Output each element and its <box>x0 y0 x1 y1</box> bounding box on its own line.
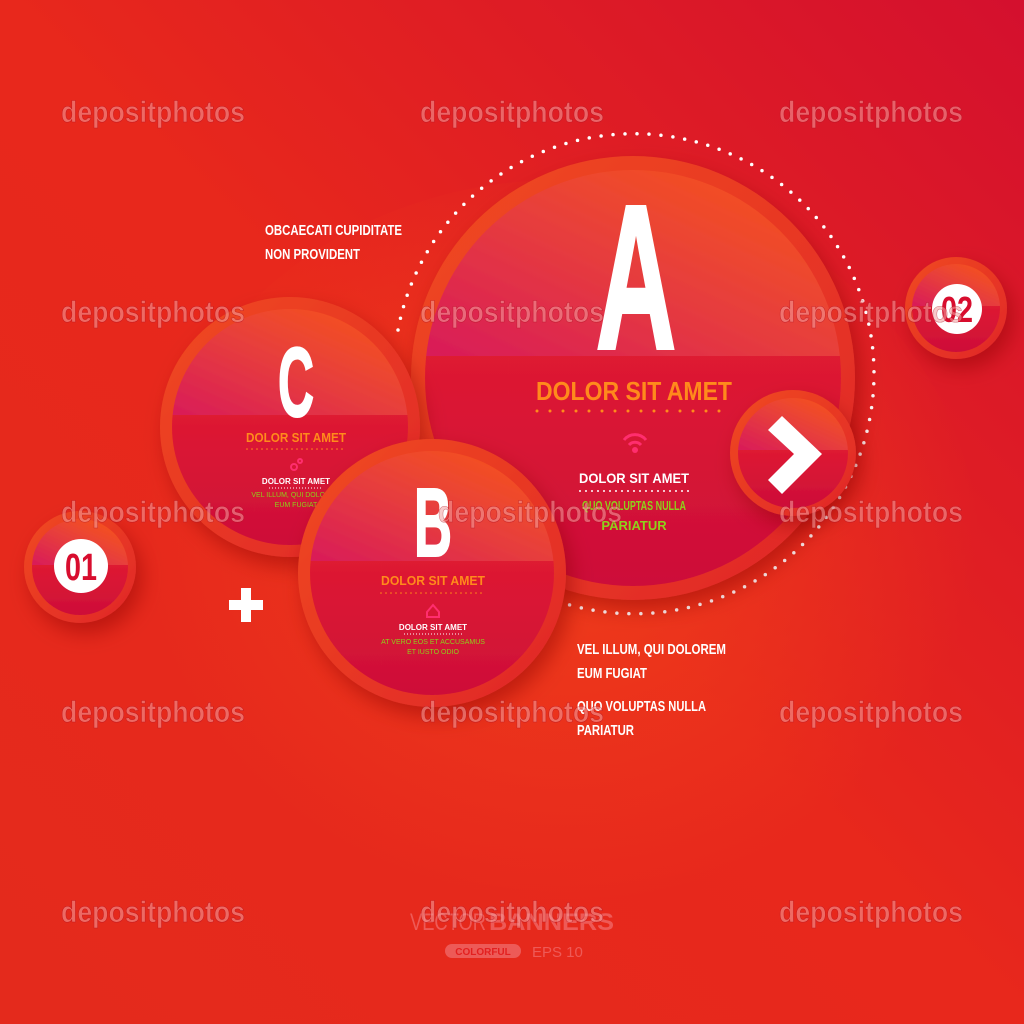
text: obcaecati: NON PROVIDENT <box>265 246 360 263</box>
watermarks: depositphotos <box>779 96 963 129</box>
watermarks <box>61 96 963 929</box>
icon: house <box>427 605 439 617</box>
badge 01 <box>24 511 136 623</box>
circle C: DOLOR SIT AMET <box>262 477 330 486</box>
footer: vector banners: VECTOR <box>410 909 486 936</box>
watermarks: depositphotos <box>779 496 963 529</box>
footer: vector banners: COLORFUL <box>455 947 511 958</box>
circle C: DOLOR SIT AMET <box>246 430 346 445</box>
circle B: DOLOR SIT AMET <box>381 573 485 588</box>
watermarks: depositphotos <box>61 496 245 529</box>
dotted ring around A <box>398 134 874 614</box>
circle B: AT VERO EOS ET ACCUSAMUS <box>381 639 485 646</box>
circle A: PARIATUR <box>601 518 667 533</box>
text: obcaecati: OBCAECATI CUPIDITATE <box>265 222 402 239</box>
watermarks: depositphotos <box>420 696 604 729</box>
letter A: A <box>596 163 676 392</box>
watermarks: depositphotos <box>61 896 245 929</box>
circle A: QUO VOLUPTAS NULLA <box>582 498 686 513</box>
text: vel illum: EUM FUGIAT <box>577 665 647 682</box>
circle A <box>410 150 860 600</box>
circle B <box>298 439 570 711</box>
watermarks: depositphotos <box>438 496 622 529</box>
A subheading: DOLOR SIT AMET <box>579 470 689 486</box>
text: vel illum <box>577 641 726 739</box>
icon: wifi <box>624 435 646 445</box>
watermarks: depositphotos <box>420 296 604 329</box>
circle C: C <box>278 327 314 437</box>
text: vel illum: PARIATUR <box>577 722 634 739</box>
footer: vector banners <box>410 909 614 961</box>
badge 02 <box>905 257 1007 359</box>
watermarks: depositphotos <box>779 296 963 329</box>
circle B: B <box>414 468 452 577</box>
circle C: EUM FUGIAT <box>275 502 318 509</box>
text: vel illum: QUO VOLUPTAS NULLA <box>577 698 706 715</box>
plus icon <box>229 588 263 622</box>
badge 02: 02 <box>941 289 973 330</box>
watermarks: depositphotos <box>61 96 245 129</box>
watermarks: depositphotos <box>420 96 604 129</box>
circle B: ET IUSTO ODIO <box>407 649 459 656</box>
watermarks: depositphotos <box>779 896 963 929</box>
footer: vector banners: BANNERS <box>489 909 614 936</box>
circle C <box>160 297 420 557</box>
watermarks: depositphotos <box>61 296 245 329</box>
text: vel illum: VEL ILLUM, QUI DOLOREM <box>577 641 726 658</box>
watermarks: depositphotos <box>61 696 245 729</box>
circle C: VEL ILLUM, QUI DOLOREM <box>251 492 341 499</box>
badge 01: 01 <box>65 547 97 589</box>
watermarks: depositphotos <box>420 896 604 929</box>
icon: gears <box>291 459 302 470</box>
footer: vector banners: EPS 10 <box>532 944 583 961</box>
arrow button <box>730 390 856 516</box>
circle B: DOLOR SIT AMET <box>399 623 467 632</box>
A heading: DOLOR SIT AMET <box>536 376 732 406</box>
text: obcaecati <box>265 222 402 263</box>
watermarks: depositphotos <box>779 696 963 729</box>
